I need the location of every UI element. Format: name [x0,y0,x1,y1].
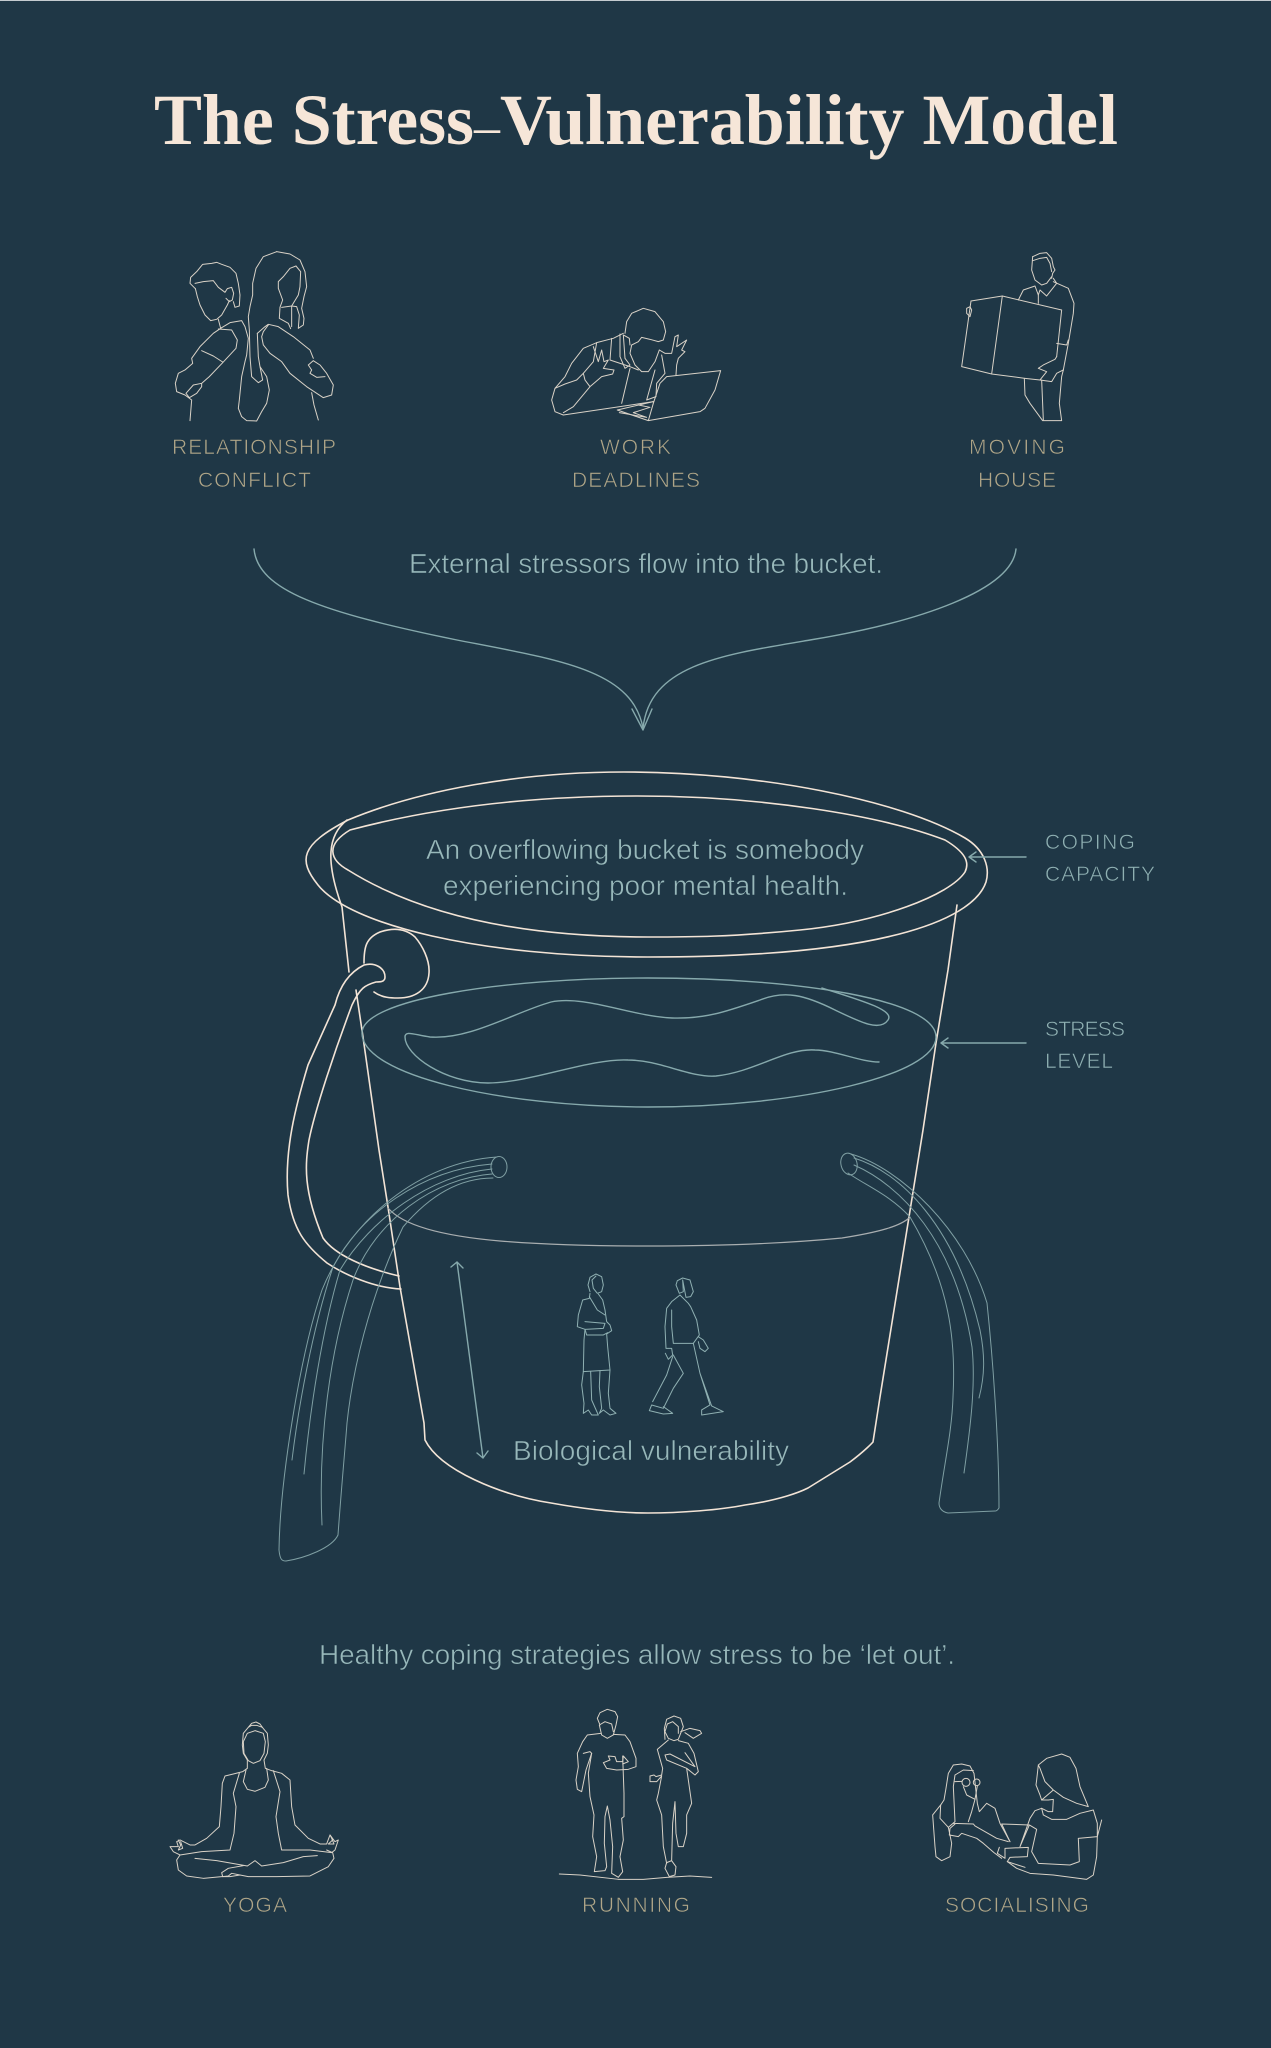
icon: running [559,1709,712,1879]
label: relationship conflict: CONFLICT [198,469,311,492]
icon: relationship conflict [175,252,333,421]
text: external stressors: External stressors flow into the bucket. [409,548,883,579]
label: moving house: HOUSE [978,469,1056,492]
icon: moving house [962,253,1074,421]
label: biological vulnerability: Biological vulnerability [513,1435,789,1466]
label: stress level [1045,1018,1125,1073]
bucket walls and base [331,820,957,1513]
label: moving house [969,436,1065,492]
label: coping capacity [1045,831,1155,886]
label: work deadlines: WORK [600,436,671,459]
arrow: stress level [941,1038,1026,1048]
label: coping capacity: CAPACITY [1045,863,1155,886]
bucket [279,772,999,1561]
icon: yoga [170,1722,338,1878]
label: running: RUNNING [582,1894,690,1917]
stress level water [362,978,936,1107]
label: socialising: SOCIALISING [945,1894,1089,1917]
icon: work deadlines [552,308,721,421]
arrow: biological vulnerability range [451,1262,488,1458]
label: relationship conflict: RELATIONSHIP [172,436,336,459]
bucket handle [287,964,401,1289]
title: The Stress–Vulnerability Model [154,80,1118,160]
arrow: coping capacity [969,852,1026,862]
label: work deadlines [572,436,700,492]
text: overflowing bucket: An overflowing bucket is somebody [426,834,864,865]
label: stress level: LEVEL [1045,1050,1113,1073]
label: stress level: STRESS [1045,1018,1125,1041]
label: relationship conflict [172,436,336,492]
text: healthy coping: Healthy coping strategies allow stress to be ‘let out’. [319,1639,955,1670]
text: overflowing bucket: experiencing poor mental health. [443,870,848,901]
bucket rim [306,772,987,957]
icon: socialising [933,1754,1102,1879]
icon: two people [577,1274,723,1415]
right outflow pipe [838,1151,999,1513]
label: yoga: YOGA [223,1894,287,1917]
left outflow pipe [279,1156,507,1561]
biological vulnerability level [388,1208,909,1246]
arrow: stressors into bucket [254,549,1016,730]
label: coping capacity: COPING [1045,831,1135,854]
bucket lug [364,929,429,998]
text: overflowing bucket [426,834,864,901]
label: moving house: MOVING [969,436,1065,459]
label: work deadlines: DEADLINES [572,469,700,492]
